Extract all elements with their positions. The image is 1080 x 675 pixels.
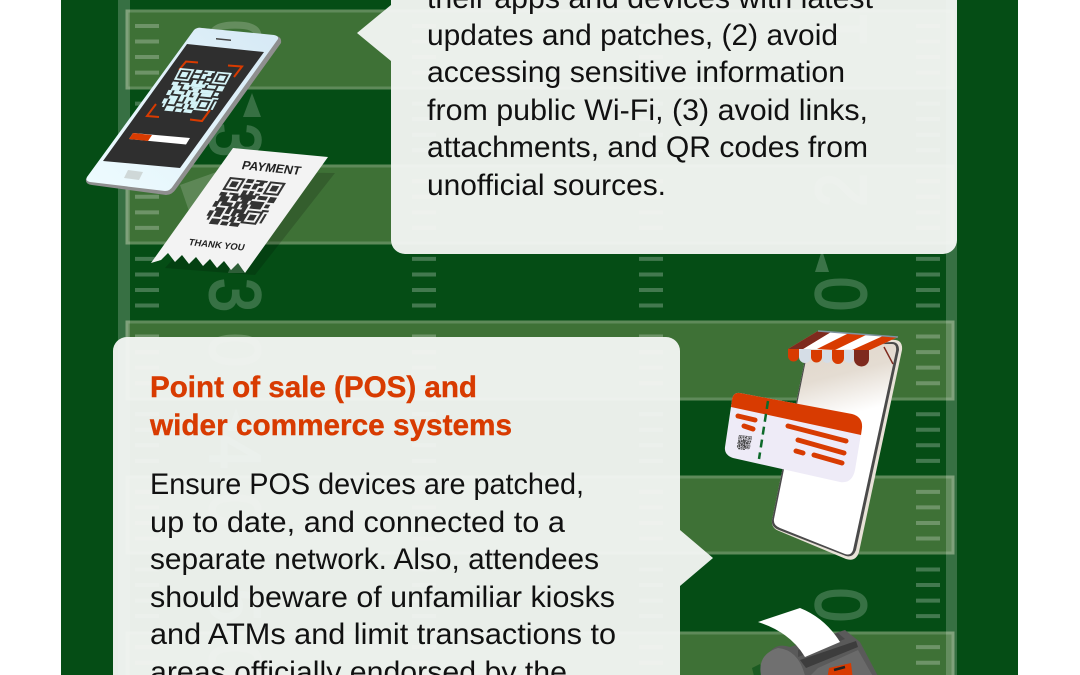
yard numbers right: 0 [802,588,882,622]
body text: device advice: from public Wi-Fi, (3) avoid links, [427,94,868,127]
body text: device advice: unofficial sources. [427,169,666,202]
icon: payment receipt with QR code [151,148,335,275]
shop awning [788,331,898,366]
panel: point of sale systems [113,337,713,675]
body text: POS advice [150,468,616,675]
body text: device advice: attachments, and QR codes from [427,131,868,164]
heading: point of sale: wider commerce systems [149,409,512,442]
yard numbers left: 0 [194,20,274,54]
icon: mobile storefront phone [725,331,902,560]
yard numbers right: 1 [802,13,882,47]
yard numbers left: 3 [194,278,274,312]
panel: mobile apps and devices advice [357,0,957,254]
body text: POS advice: should beware of unfamiliar kiosks [150,581,615,614]
body text: device advice: accessing sensitive information [427,56,845,89]
sidelines [118,0,957,675]
yard numbers left: 5 [194,588,274,622]
body text: device advice: updates and patches, (2) avoid [427,19,838,52]
icon: payment receipt with QR code: PAYMENT [240,159,303,178]
yard numbers right: 0 [802,277,882,311]
body text: POS advice: and ATMs and limit transactions to [150,618,616,651]
ticket card [725,393,862,482]
body text: POS advice: separate network. Also, attendees [150,543,599,576]
heading: point of sale [149,371,512,442]
yard numbers left [194,20,274,675]
light shape behind phone [180,165,236,243]
yard numbers right [802,13,882,622]
body text: device advice [427,0,873,202]
heading: point of sale: Point of sale (POS) and [150,371,477,404]
icon: payment receipt with QR code: THANK YOU [187,237,246,253]
yard numbers left: 3 [194,123,274,157]
yard hash marks [147,0,928,675]
yard numbers left: 4 [194,435,274,469]
icon: phone scanning QR code [86,28,281,195]
body text: POS advice: up to date, and connected to a [150,506,566,539]
body text: POS advice: Ensure POS devices are patched, [150,468,584,501]
icon: POS card terminal [752,608,880,675]
yard numbers right: 2 [802,173,882,207]
yard numbers left: 0 [194,333,274,367]
alternating yard bands [127,11,953,675]
yard numbers left: 0 [194,493,274,527]
